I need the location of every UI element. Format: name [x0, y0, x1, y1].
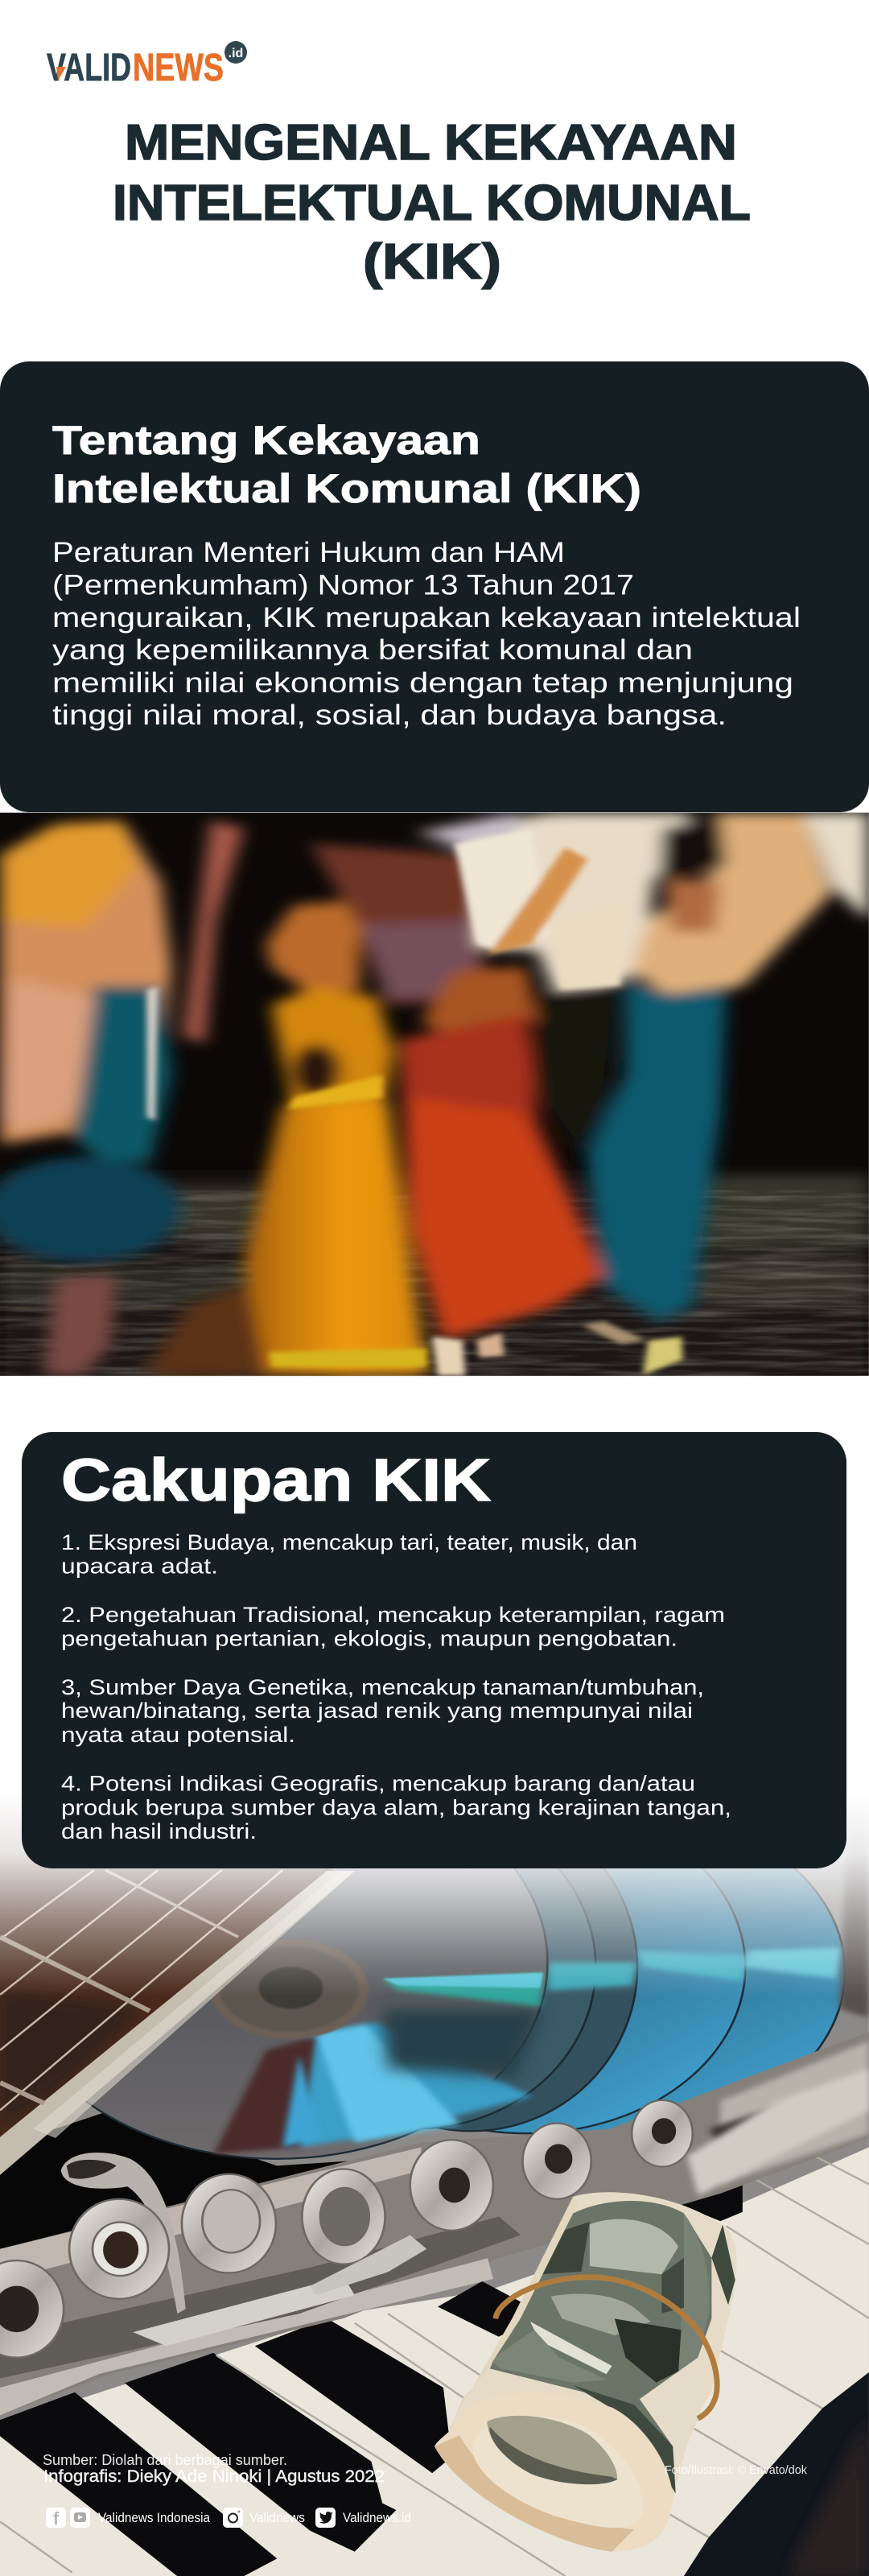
item 1: 1. Ekspresi Budaya, mencakup tari, teater, musik, dan [61, 1530, 637, 1554]
logo accent [56, 67, 66, 80]
item 2 [61, 1603, 725, 1651]
panel body text: yang kepemilikannya bersifat komunal dan [52, 634, 693, 666]
main disc [85, 1868, 549, 2160]
back discs [578, 1868, 846, 2132]
panel heading [52, 418, 641, 511]
logo wordmark: NEWS: NEWS [133, 47, 224, 89]
right side top [835, 1856, 869, 2019]
guitar fretboard [0, 1830, 333, 2137]
facebook youtube label: Validnews Indonesia [98, 2510, 210, 2525]
disc hub [210, 1939, 369, 2039]
photo: guitar, discs, flute, money on piano [0, 1759, 869, 2576]
item 4: dan hasil industri. [61, 1819, 257, 1843]
credits: source and designer [43, 2452, 385, 2486]
credits: source and designer: Infografis: Dieky Ade Ninoki | Agustus 2022 [43, 2467, 385, 2486]
item 4: 4. Potensi Indikasi Geografis, mencakup barang dan/atau [61, 1771, 695, 1795]
panel heading: Cakupan KIK [61, 1447, 491, 1513]
item 3 [61, 1675, 704, 1747]
icon: twitter [315, 2508, 336, 2528]
back figure [311, 844, 488, 1005]
yellow dancer [266, 902, 360, 993]
white top fade [0, 1791, 869, 1996]
social links [46, 2508, 411, 2529]
flute body [0, 2032, 869, 2415]
icon: facebook: f [53, 2508, 60, 2529]
money roll [434, 2192, 737, 2552]
title: INTELEKTUAL KOMUNAL [113, 175, 751, 231]
item 1 [61, 1530, 637, 1578]
panel body text: tinggi nilai moral, sosial, dan budaya bangsa. [52, 700, 727, 731]
panel heading: Tentang Kekayaan [52, 418, 480, 463]
left dancer [0, 820, 171, 1144]
title [113, 115, 751, 290]
instagram label: Validnews [249, 2510, 305, 2525]
item 1: upacara adat. [61, 1554, 218, 1578]
panel body text: memiliki nilai ekonomis dengan tetap menjunjung [52, 667, 793, 699]
panel body text: menguraikan, KIK merupakan kekayaan intelektual [52, 602, 801, 634]
logo badge: .id [224, 41, 247, 64]
item 3: nyata atau potensial. [61, 1723, 295, 1747]
teal dress [587, 978, 726, 1321]
piano keyboard [0, 2147, 869, 2576]
flute keys [61, 2153, 186, 2314]
logo: Validnews.id [47, 41, 247, 89]
dark background under neck [0, 2113, 348, 2249]
panel body text: (Permenkumham) Nomor 13 Tahun 2017 [52, 570, 634, 601]
item 2: 2. Pengetahuan Tradisional, mencakup keterampilan, ragam [61, 1603, 725, 1627]
photo credit: Foto/Ilustrasi: © Envato/dok [665, 2463, 807, 2477]
panel body text [52, 537, 801, 731]
item 4 [61, 1771, 731, 1843]
photo: blurred dancers [0, 805, 869, 1379]
panel heading: Intelektual Komunal (KIK) [52, 466, 641, 511]
item 3: hewan/binatang, serta jasad renik yang mempunyai nilai [61, 1699, 693, 1723]
title: MENGENAL KEKAYAAN [125, 115, 737, 171]
icon: facebook [46, 2508, 66, 2529]
title: (KIK) [363, 234, 501, 290]
icon: youtube [70, 2508, 90, 2528]
white shirted man [416, 813, 693, 993]
credits: source and designer: Sumber: Diolah dari berbagai sumber. [43, 2452, 287, 2468]
item 3: 3, Sumber Daya Genetika, mencakup tanaman/tumbuhan, [61, 1675, 704, 1699]
guitar neck edge [0, 1871, 355, 2175]
icon: instagram [223, 2508, 243, 2528]
logo badge: .id: .id [229, 47, 243, 60]
item 2: pengetahuan pertanian, ekologis, maupun pengobatan. [61, 1627, 677, 1651]
logo wordmark: VALID: VALID [47, 47, 131, 89]
roll end [434, 2393, 673, 2552]
right dancer [632, 813, 831, 997]
panel body text: Peraturan Menteri Hukum dan HAM [52, 537, 565, 568]
red dress [421, 967, 537, 1036]
item 4: produk berupa sumber daya alam, barang kerajinan tangan, [61, 1795, 731, 1819]
panel: tentang KIK [0, 361, 869, 812]
panel: cakupan KIK [22, 1432, 846, 1868]
rubber band [496, 2277, 717, 2418]
twitter label: Validnews.id [343, 2510, 411, 2525]
